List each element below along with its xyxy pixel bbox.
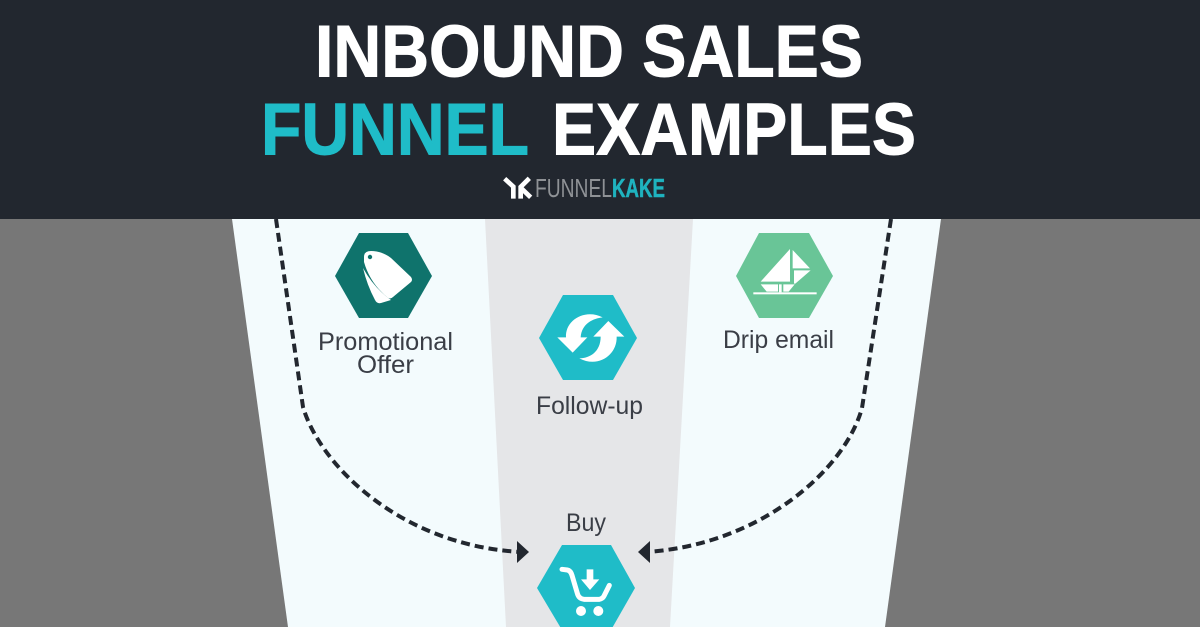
title word: examples: EXAMPLES [552, 90, 916, 170]
hexagon [539, 295, 637, 380]
title line 1: INBOUND SALES [315, 12, 863, 92]
hexagon [736, 233, 833, 318]
title [261, 12, 916, 170]
funnel shape [232, 219, 941, 627]
promotional offer step [318, 233, 453, 379]
buy step [537, 509, 635, 627]
icon: price tags [335, 233, 432, 318]
label: Follow-up [536, 392, 643, 420]
banner background [0, 0, 1200, 219]
label line 1: Promotional [318, 328, 453, 356]
follow-up step [536, 295, 643, 420]
logo [505, 173, 665, 203]
logo wordmark: funnel: FUNNEL [535, 173, 612, 203]
funnel centre column [485, 219, 693, 627]
header banner [0, 0, 1200, 219]
dashed path [276, 219, 520, 552]
arrowhead [638, 541, 650, 563]
boat [753, 249, 817, 294]
icon: paper boat [736, 233, 833, 318]
tag hole [368, 255, 372, 259]
cart [562, 569, 609, 616]
arrows [557, 314, 624, 362]
hexagon [537, 545, 635, 627]
title word: funnel: FUNNEL [261, 90, 529, 170]
dashed arrow: promotional offer to buy [276, 219, 529, 563]
back tag [363, 268, 391, 303]
front tag [364, 251, 412, 298]
logo wordmark: kake: KAKE [612, 173, 665, 203]
icon: shopping cart [537, 545, 635, 627]
label: Buy [566, 509, 606, 537]
drip email step [723, 233, 834, 354]
hexagon [335, 233, 432, 318]
label [318, 328, 453, 379]
funnel body [232, 219, 941, 627]
label: Drip email [723, 326, 834, 354]
label line 2: Offer [357, 351, 414, 379]
arrowhead [517, 541, 529, 563]
dashed arrow: drip email to buy [638, 219, 891, 563]
logo mark [505, 178, 531, 199]
dashed path [646, 219, 891, 552]
icon: sync arrows [539, 295, 637, 380]
